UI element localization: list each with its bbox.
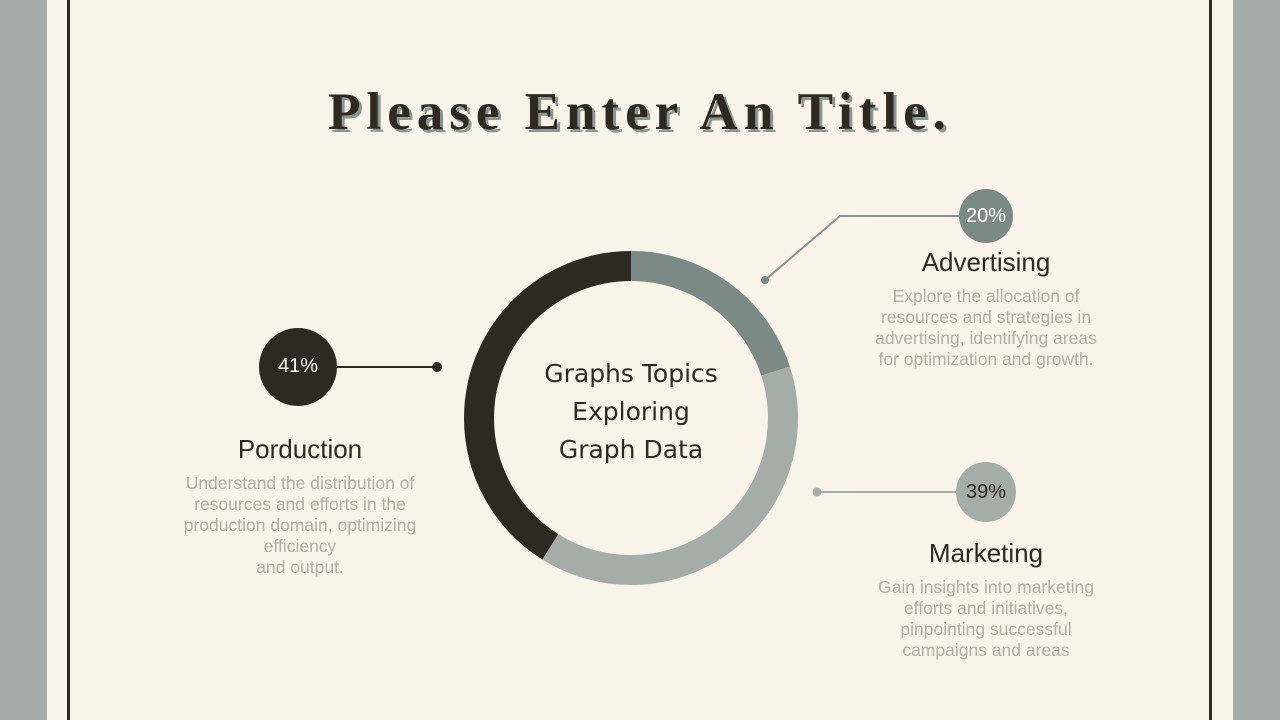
marketing block: efforts and initiatives,: [904, 598, 1068, 618]
text: 20%: [966, 205, 1006, 227]
marketing block: campaigns and areas: [902, 640, 1070, 660]
production block: Understand the distribution of: [186, 473, 414, 493]
production block: efficiency: [264, 536, 336, 556]
center text: Graph Data: [559, 435, 703, 464]
marketing block: Gain insights into marketing: [878, 577, 1094, 597]
center text: Exploring: [572, 397, 690, 426]
title: Please Enter An Title.: [328, 83, 952, 141]
advertising block: Advertising: [922, 247, 1050, 277]
center text: Graphs Topics: [544, 359, 718, 388]
advertising block: for optimization and growth.: [878, 349, 1093, 369]
production block: and output.: [256, 557, 344, 577]
marketing block: Marketing: [929, 538, 1043, 568]
advertising block: advertising, identifying areas: [875, 328, 1097, 348]
percent labels: 41%: [278, 355, 318, 377]
text: 39%: [966, 481, 1006, 503]
production block: resources and efforts in the: [194, 494, 406, 514]
production block: production domain, optimizing: [184, 515, 416, 535]
advertising block: Explore the allocation of: [893, 286, 1079, 306]
advertising block: [875, 247, 1097, 369]
production block: Porduction: [238, 434, 362, 464]
advertising block: resources and strategies in: [881, 307, 1091, 327]
marketing block: [878, 538, 1094, 660]
production block: [184, 434, 416, 577]
center text: [544, 359, 718, 464]
marketing block: pinpointing successful: [900, 619, 1072, 639]
